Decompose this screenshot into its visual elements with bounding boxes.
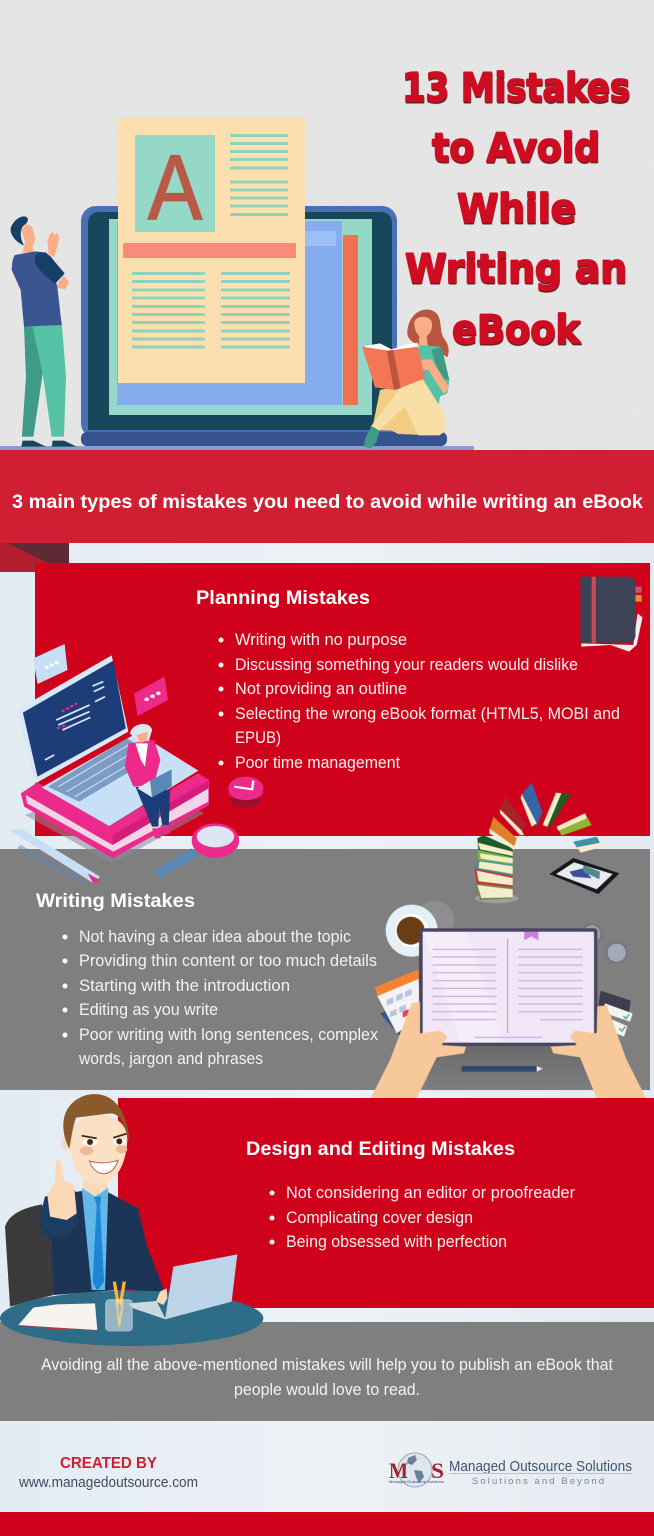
t-shirt (12, 251, 62, 327)
tablet (419, 928, 597, 1046)
banner background (0, 450, 654, 543)
list: planning mistakes: Not providing an outline (235, 679, 407, 698)
illustration: book arc and reading tablet (371, 783, 646, 1098)
panel: writing mistakes (0, 849, 650, 1090)
list: planning mistakes: Discussing something your readers would dislike (235, 655, 578, 674)
pencil (462, 1066, 543, 1072)
tie (93, 1197, 104, 1291)
sleeve (432, 347, 449, 380)
floor line (0, 446, 474, 450)
heading: design and editing mistakes: Design and Editing Mistakes (246, 1139, 515, 1160)
bottom bar (0, 1512, 654, 1536)
icon: chat bubble pink (134, 677, 168, 716)
pink book cover (21, 773, 209, 858)
strap (592, 577, 596, 643)
footer (18, 1453, 632, 1491)
laptop (128, 1254, 237, 1319)
logo letter M: M (389, 1458, 408, 1483)
list: design and editing mistakes: Complicating cover design (286, 1208, 473, 1227)
tabs (635, 587, 642, 593)
page background: top paper (0, 0, 654, 450)
page background: lower light area (0, 543, 654, 1512)
back leg (372, 387, 425, 435)
illustration: man looking up (11, 216, 77, 447)
screen accent (57, 703, 77, 728)
mini tablet (549, 858, 619, 894)
title line 5: eBook (452, 308, 581, 353)
salmon heading bar (123, 243, 296, 258)
panel background (0, 849, 650, 1090)
cream document page (118, 118, 305, 383)
list: planning mistakes (218, 630, 620, 772)
hair (63, 1094, 129, 1149)
list: planning mistakes: Selecting the wrong eBook format (HTML5, MOBI and (235, 704, 620, 723)
heading: writing mistakes: Writing Mistakes (36, 891, 195, 912)
list: design and editing mistakes: Not considering an editor or proofreader (286, 1183, 575, 1202)
book stack (474, 835, 518, 903)
pencil holder (106, 1282, 132, 1331)
globe (398, 1453, 432, 1487)
icon: notebook (580, 577, 643, 652)
trousers shade (22, 325, 43, 437)
logo caption: Managed Outsource Solutions (389, 1479, 444, 1484)
collar (135, 743, 148, 767)
open book (18, 1303, 97, 1330)
icon: clock (228, 777, 263, 807)
orange book spine (343, 235, 358, 405)
hand right (551, 1005, 646, 1098)
panel: planning mistakes (35, 563, 650, 836)
top (417, 345, 449, 405)
face and neck (414, 317, 432, 347)
list: writing mistakes (62, 927, 378, 1068)
lime book (557, 813, 592, 836)
illustration: businessman at desk (0, 1094, 263, 1346)
foot (364, 426, 379, 449)
blue book (522, 783, 542, 827)
subtitle banner (0, 450, 654, 572)
head (68, 1115, 127, 1184)
small light panel (300, 231, 336, 246)
orange book (490, 817, 517, 849)
title line 4: Writing an (405, 247, 627, 292)
icon: coffee cup (386, 905, 438, 957)
logo (389, 1453, 444, 1487)
panel background (35, 563, 650, 836)
pen (9, 828, 100, 884)
text lines lower columns (132, 274, 290, 347)
neck (83, 1175, 107, 1197)
legs (135, 787, 170, 827)
title line 2: to Avoid (432, 126, 600, 171)
logo letter S: S (431, 1458, 444, 1483)
chair (5, 1204, 55, 1307)
company name: Managed Outsource Solutions (449, 1458, 632, 1475)
magnifier (154, 823, 239, 878)
bookmark (524, 932, 538, 940)
neck and face (21, 224, 35, 253)
cards (598, 991, 633, 1037)
shirt (82, 1188, 108, 1290)
laptop base (81, 432, 447, 446)
banner fold shade (8, 543, 69, 564)
loose pages (581, 613, 643, 652)
panel: closing note (0, 1322, 654, 1421)
list: planning mistakes: EPUB) (235, 728, 281, 747)
closing text line 2: people would love to read. (234, 1380, 420, 1399)
hand on laptop (156, 1288, 167, 1305)
list: writing mistakes: words, jargon and phrases (78, 1049, 263, 1068)
laptop bezel (88, 212, 392, 430)
big letter A: A (148, 137, 203, 239)
laptop base (42, 733, 198, 826)
company rule (449, 1473, 632, 1474)
thumb up hand (47, 1160, 77, 1220)
person on laptop (125, 724, 172, 838)
dark green book (543, 793, 571, 827)
banner text: 3 main types of mistakes you need to avoid while writing an eBook (12, 491, 643, 513)
pink book stripe (113, 781, 208, 845)
jacket (40, 1191, 163, 1300)
open book (362, 343, 425, 390)
hand left (371, 1002, 466, 1098)
list: writing mistakes: Providing thin content or too much details (79, 951, 377, 970)
continents (407, 1455, 424, 1483)
smile (89, 1160, 118, 1174)
title line 3: While (457, 187, 576, 232)
sleeve (35, 253, 65, 284)
website: www.managedoutsource.com (18, 1474, 198, 1491)
laptop screen (23, 661, 126, 777)
book pages (26, 788, 208, 852)
list: design and editing mistakes: Being obsessed with perfection (286, 1232, 507, 1251)
heading: planning mistakes: Planning Mistakes (196, 588, 370, 609)
laptop screen frame (17, 655, 128, 783)
page lines (433, 949, 582, 1037)
laptop frame (81, 206, 397, 438)
shoes (21, 441, 77, 447)
trousers (22, 322, 66, 437)
raised hand and arm (47, 232, 69, 289)
illustration: laptop on pink books (9, 644, 263, 884)
book cover (362, 347, 425, 390)
gutter line (506, 938, 509, 1033)
list: writing mistakes: Poor writing with long sentences, complex (79, 1025, 378, 1044)
list: writing mistakes: Starting with the introduction (79, 976, 290, 995)
icon: chat bubble light (33, 644, 68, 684)
cover (580, 577, 635, 643)
screen glare (423, 932, 503, 1042)
raised sleeve (39, 1190, 78, 1238)
tablet shadow (428, 1045, 590, 1090)
arc books (489, 783, 603, 853)
title (402, 66, 630, 353)
illustration: laptop with eBook page (0, 118, 474, 450)
keyboard (48, 738, 155, 802)
hair (407, 309, 449, 357)
list: writing mistakes: Editing as you write (79, 1000, 218, 1019)
list: design and editing mistakes (270, 1183, 575, 1251)
illustration: woman reading (362, 309, 449, 449)
book pages (365, 343, 419, 353)
ground shadow (25, 807, 204, 863)
small laptop (150, 769, 172, 797)
created by label: CREATED BY (60, 1455, 157, 1472)
glasses (582, 924, 627, 963)
list: writing mistakes: Not having a clear idea about the topic (79, 927, 351, 946)
keyboard rows (58, 743, 148, 797)
eyes and brows (82, 1134, 127, 1138)
list: planning mistakes: Writing with no purpose (235, 630, 407, 649)
tablet body (419, 928, 597, 1046)
closing text line 1: Avoiding all the above-mentioned mistakes will help you to publish an eBook that (41, 1355, 613, 1374)
blue page behind (117, 221, 342, 405)
text lines right of tile (230, 136, 288, 214)
screen lines (45, 682, 105, 760)
front leg (371, 375, 446, 435)
panel: design and editing mistakes (118, 1098, 654, 1308)
red book (501, 797, 526, 835)
tagline: Solutions and Beyond (472, 1476, 604, 1487)
coffee shadow (416, 901, 454, 939)
panel background (0, 1322, 654, 1421)
cheeks (80, 1146, 93, 1155)
laptop screen (109, 219, 372, 415)
teal book (573, 837, 603, 853)
hair (11, 216, 28, 245)
banner fold (0, 543, 69, 572)
list: planning mistakes: Poor time management (235, 753, 400, 772)
shoes (152, 825, 170, 838)
ear (62, 1135, 69, 1150)
calendar (375, 969, 422, 1037)
book spine (387, 350, 401, 390)
letter tile (135, 135, 215, 232)
shirt (125, 740, 160, 787)
panel background (118, 1098, 654, 1308)
tablet screen (423, 932, 594, 1043)
desk (0, 1291, 263, 1346)
head and hair (130, 724, 152, 742)
forearm (412, 359, 449, 394)
